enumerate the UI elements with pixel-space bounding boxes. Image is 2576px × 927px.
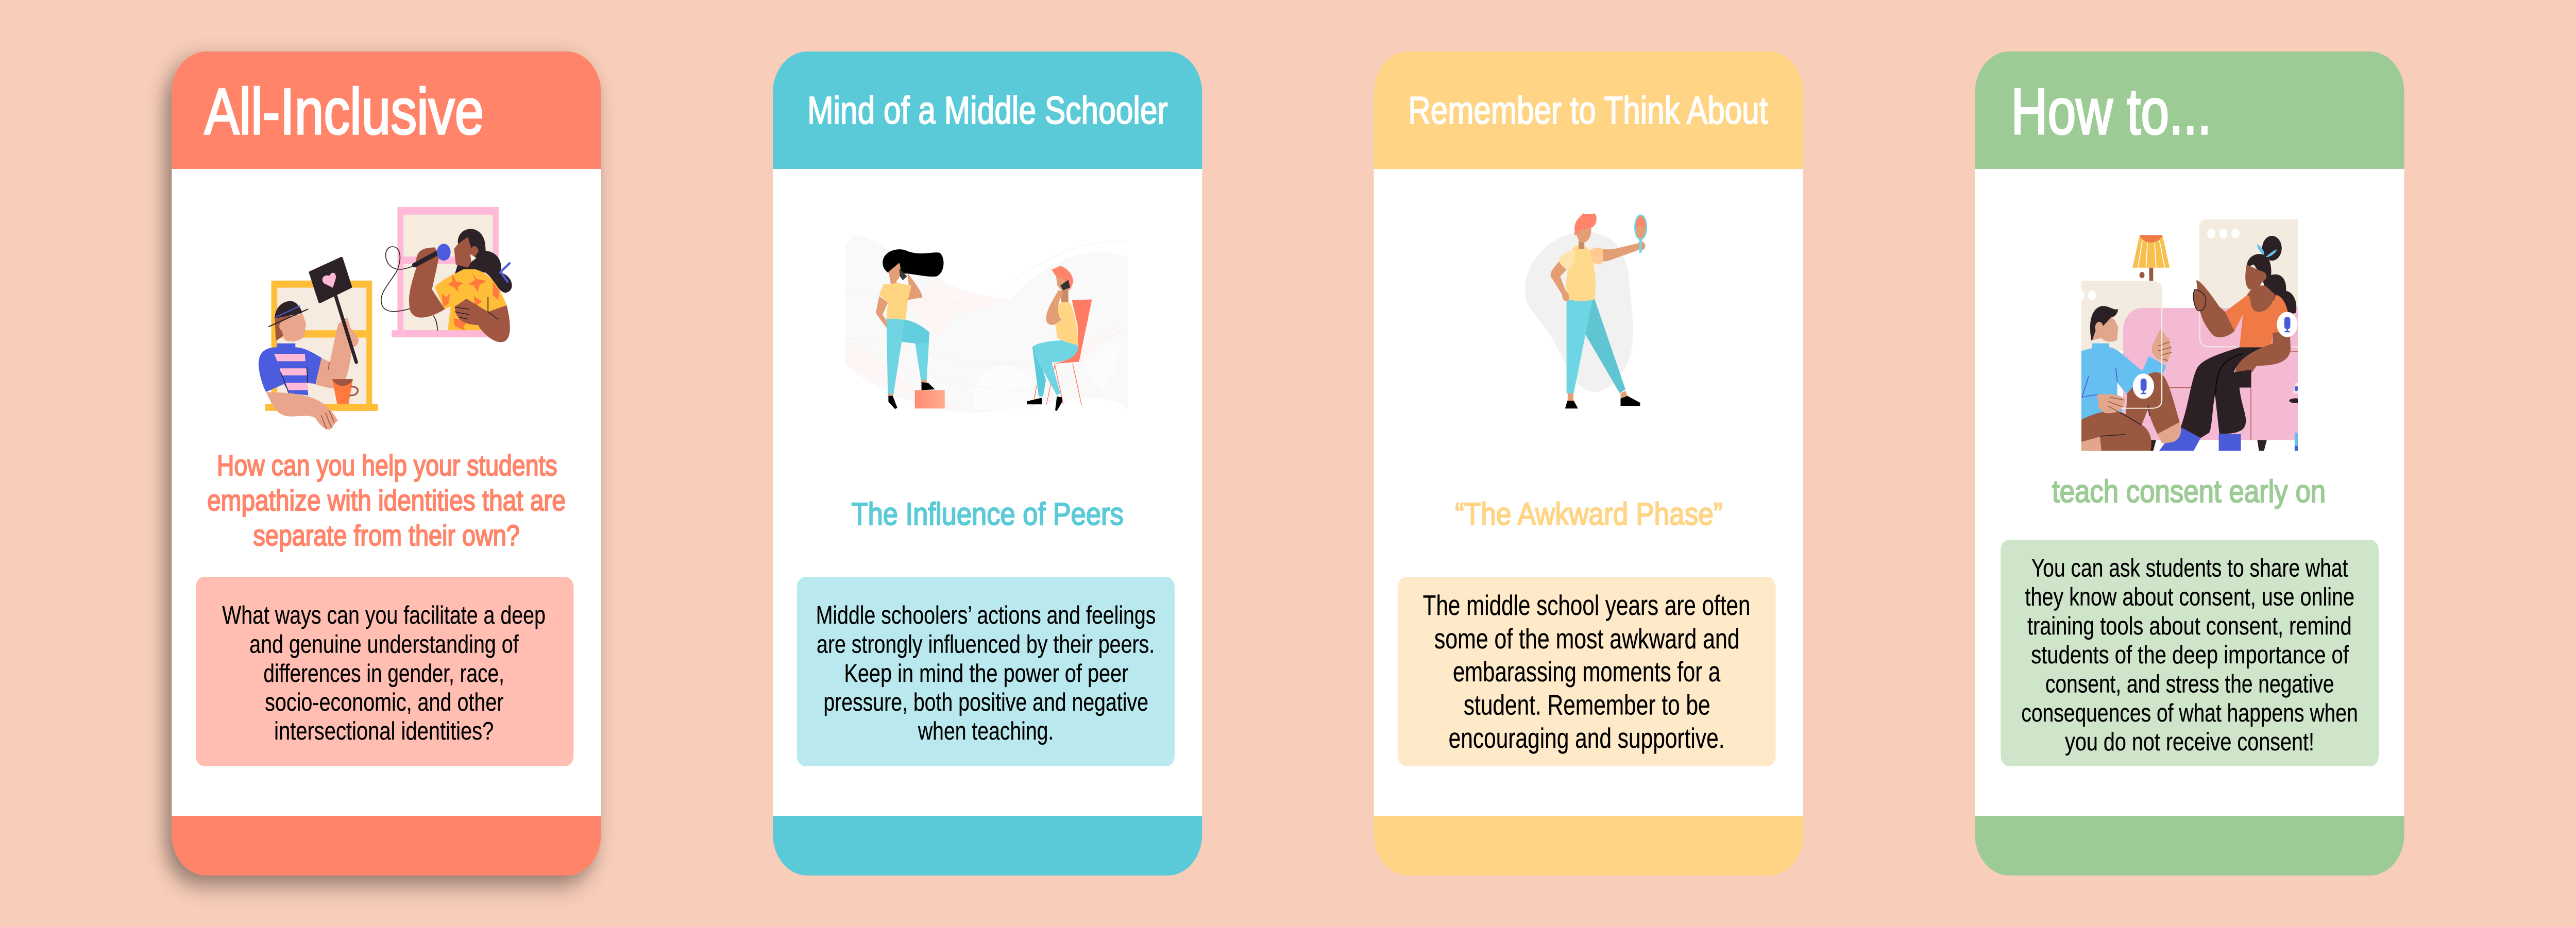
box step xyxy=(915,390,945,408)
card 2 blue frame xyxy=(773,52,1202,876)
illustration: person with hand mirror xyxy=(1525,213,1647,408)
subheading: How can you help: separate from their own? xyxy=(253,520,520,552)
panel: All-Inclusive card xyxy=(172,52,601,876)
callout box: identities question: differences in gender, race, xyxy=(263,659,504,688)
callout box: awkward years: encouraging and supportive. xyxy=(1449,722,1725,754)
callout box: peer influence xyxy=(797,577,1175,766)
callout box: identities question: socio-economic, and other xyxy=(265,688,504,716)
subheading: How can you help: empathize with identities that are xyxy=(207,485,566,517)
callout box: identities question: intersectional identities? xyxy=(274,716,494,745)
seated man xyxy=(2081,306,2181,451)
heading: All-Inclusive: All-Inclusive xyxy=(205,75,484,148)
card 2 white body xyxy=(773,169,1202,816)
subheading: How can you help xyxy=(207,450,566,552)
callout box: awkward years xyxy=(1398,577,1776,766)
panel: Remember to Think About card xyxy=(1374,52,1803,876)
subheading: The Awkward Phase: “The Awkward Phase” xyxy=(1455,496,1723,531)
callout box: consent advice: training tools about consent, remind xyxy=(2027,611,2352,640)
subheading: teach consent early on: teach consent early on xyxy=(2052,474,2326,509)
callout box: consent advice: students of the deep importance of xyxy=(2031,640,2349,669)
callout box: consent advice: they know about consent, use online xyxy=(2025,582,2354,611)
callout box: peer influence: when teaching. xyxy=(918,716,1054,745)
callout box: peer influence: pressure, both positive and negative xyxy=(823,688,1148,716)
callout box: peer influence: are strongly influenced by their peers. xyxy=(817,630,1155,658)
callout box: identities question: and genuine understanding of xyxy=(249,630,519,658)
heading: Mind of a Middle Schooler: Mind of a Middle Schooler xyxy=(807,89,1168,132)
card 4 white body xyxy=(1975,169,2404,816)
singing woman xyxy=(381,229,512,342)
illustration: two students on the phone xyxy=(845,234,1128,413)
card 1 white body xyxy=(172,169,601,816)
subheading: The Influence of Peers: The Influence of Peers xyxy=(852,496,1124,531)
hand mirror xyxy=(1635,215,1647,253)
yellow window xyxy=(265,281,378,411)
callout box: awkward years: student. Remember to be xyxy=(1464,689,1710,720)
figure xyxy=(1550,213,1645,408)
seated man on chair xyxy=(1027,266,1092,411)
illustration: two people on a sofa video calling xyxy=(2078,219,2302,451)
callout box: identities question xyxy=(196,577,573,766)
man with heart sign xyxy=(259,258,359,430)
subheading: How can you help: How can you help your students xyxy=(217,450,557,482)
sofa legs and seams xyxy=(2150,440,2267,451)
card 1 coral frame with shadow xyxy=(172,52,601,876)
illustration: two neighbours at windows xyxy=(259,207,512,430)
side table cup and foot xyxy=(2289,383,2302,451)
panel: Mind of a Middle Schooler card xyxy=(773,52,1202,876)
video frame: woman xyxy=(2199,219,2298,347)
callout box: peer influence: Keep in mind the power of peer xyxy=(844,659,1128,688)
seated woman xyxy=(2159,236,2298,451)
heading: Remember to Think About: Remember to Think About xyxy=(1408,89,1768,132)
grey blob xyxy=(1525,232,1633,392)
callout box: consent advice: You can ask students to share what xyxy=(2031,554,2348,582)
soft background wash xyxy=(845,234,1128,413)
video frame: man xyxy=(2078,281,2162,351)
pink window xyxy=(392,207,499,337)
callout box: consent advice xyxy=(2001,540,2379,766)
card 3 yellow frame xyxy=(1374,52,1803,876)
callout box: awkward years: embarassing moments for a xyxy=(1453,656,1721,688)
callout box: consent advice: consent, and stress the negative xyxy=(2045,670,2334,698)
callout box: identities question: What ways can you facilitate a deep xyxy=(222,600,546,629)
standing woman xyxy=(876,249,943,409)
pink sofa xyxy=(2123,308,2298,440)
callout box: awkward years: some of the most awkward and xyxy=(1434,623,1740,655)
callout box: awkward years: The middle school years are often xyxy=(1423,589,1751,621)
heading: How to...: How to... xyxy=(2011,75,2212,148)
card 4 green frame xyxy=(1975,52,2404,876)
callout box: peer influence: Middle schoolers’ actions and feelings xyxy=(816,600,1156,629)
panel: How to card xyxy=(1975,52,2404,876)
callout box: consent advice: you do not receive consent! xyxy=(2065,727,2314,756)
card 3 white body xyxy=(1374,169,1803,816)
floor lamp xyxy=(2132,235,2170,310)
callout box: consent advice: consequences of what happens when xyxy=(2021,698,2358,727)
